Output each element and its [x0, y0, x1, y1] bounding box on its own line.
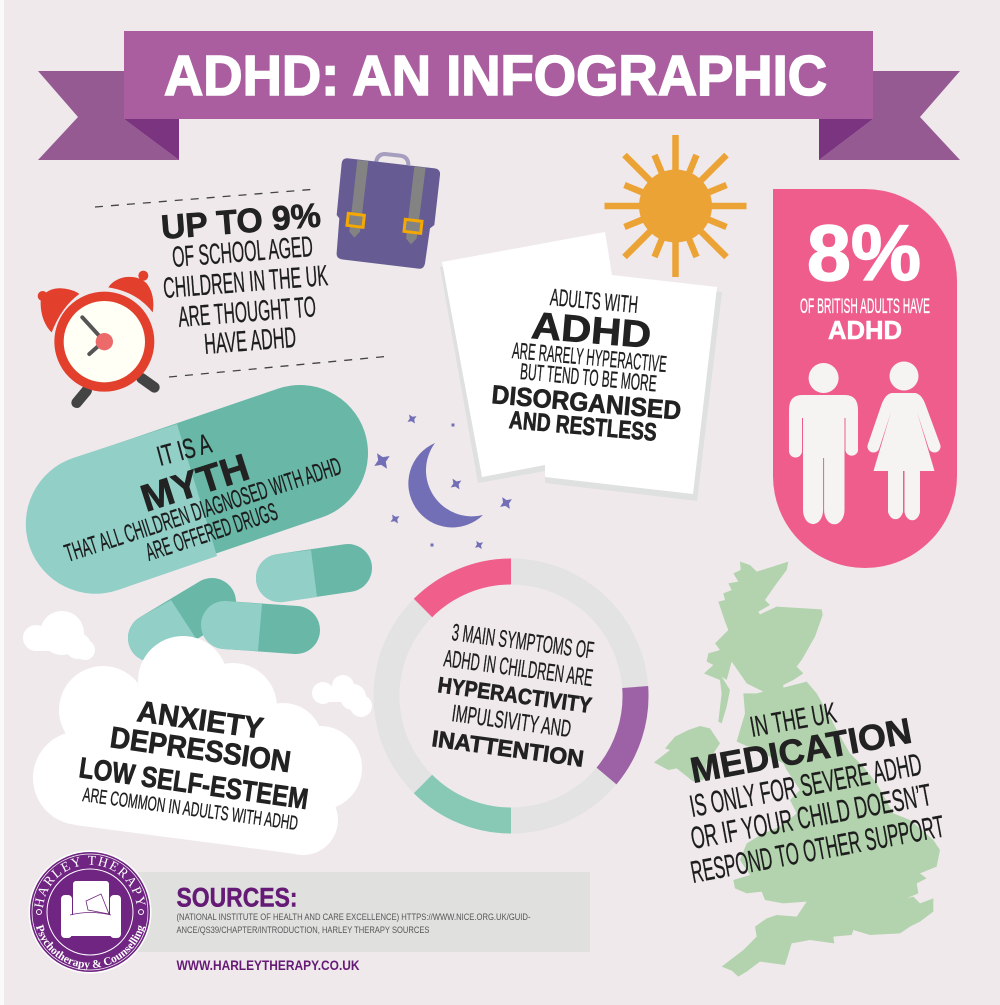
icon: armchair [61, 881, 121, 938]
block: up to 9 percent: UP TO 9% [160, 197, 322, 247]
panel: paper note: BUT TEND TO BE MORE [519, 358, 658, 396]
panel: 8 percent of British adults: 8% [807, 208, 921, 297]
icon: sun [604, 135, 746, 277]
panel: paper note: DISORGANISED [490, 379, 682, 426]
block: up to 9 percent: ARE THOUGHT TO [177, 291, 317, 334]
panel: sources: ANCE/QS39/CHAPTER/INTRODUCTION, HARLEY THERAPY SOURCES [176, 925, 430, 935]
logo: Harley Therapy: HARLEY THERAPY [34, 856, 146, 908]
chart: symptoms donut: IMPULSIVITY AND [450, 700, 573, 743]
panel: paper note: ADHD [530, 305, 653, 357]
icon: woman [867, 362, 941, 520]
panel: 8 percent of British adults [773, 189, 957, 568]
panel: 8 percent of British adults: ADHD [828, 315, 902, 345]
icon: school bag [337, 154, 440, 269]
icon: capsule back [128, 600, 212, 662]
panel: sources [130, 872, 590, 973]
panel: anxiety cloud: ARE COMMON IN ADULTS WITH ADHD [81, 784, 299, 835]
panel: anxiety cloud [33, 636, 362, 855]
panel: myth pill: IT IS A [154, 428, 215, 472]
block: up to 9 percent [95, 189, 391, 377]
panel: paper note: AND RESTLESS [508, 406, 658, 447]
panel: myth pill: ARE OFFERED DRUGS [142, 498, 281, 567]
chart: symptoms donut: ADHD IN CHILDREN ARE [442, 645, 594, 692]
logo: Harley Therapy [28, 850, 152, 974]
panel: UK map medication: MEDICATION [687, 710, 915, 791]
map: Northern Ireland [654, 726, 720, 782]
icon: capsule front [201, 601, 296, 651]
panel: anxiety cloud: ANXIETY [135, 695, 265, 746]
chart: symptoms donut: HYPERACTIVITY [436, 672, 594, 718]
panel: myth pill [26, 424, 345, 594]
panel: paper note: ARE RARELY HYPERACTIVE [511, 337, 668, 377]
block: up to 9 percent: CHILDREN IN THE UK [162, 260, 329, 305]
icon: moon and stars [374, 414, 512, 549]
panel: myth pill: MYTH [136, 447, 254, 521]
icon: man [789, 363, 858, 524]
block: up to 9 percent: OF SCHOOL AGED [171, 231, 314, 274]
panel: sources: (NATIONAL INSTITUTE OF HEALTH AND CARE EXCELLENCE) HTTPS://WWW.NICE.ORG.UK/GUID- [176, 912, 530, 922]
panel: myth pill: THAT ALL CHILDREN DIAGNOSED WITH ADHD [61, 452, 345, 568]
panel: anxiety cloud: DEPRESSION [108, 721, 293, 779]
logo: Harley Therapy: Psychotherapy & Counselling [36, 924, 146, 970]
icon: small cloud right [312, 675, 372, 717]
block: up to 9 percent: HAVE ADHD [203, 322, 297, 361]
title banner [38, 31, 960, 160]
panel: sources: SOURCES: [176, 882, 298, 912]
icon: alarm clock [38, 271, 154, 403]
panel: paper note [440, 232, 722, 501]
chart: symptoms donut [386, 572, 636, 820]
map: Great Britain [704, 562, 940, 977]
chart: symptoms donut: INATTENTION [430, 725, 585, 772]
panel: UK map medication [654, 562, 947, 977]
icon: capsule right [256, 550, 348, 602]
panel: sources: WWW.HARLEYTHERAPY.CO.UK [176, 957, 360, 973]
chart: symptoms donut: 3 MAIN SYMPTOMS OF [450, 619, 596, 665]
panel: UK map medication: IN THE UK [748, 697, 839, 744]
panel: anxiety cloud: LOW SELF-ESTEEM [77, 752, 310, 816]
ribbon tail left [38, 71, 179, 160]
ribbon tail right [819, 71, 960, 160]
panel: paper note: ADULTS WITH [549, 284, 639, 319]
title: ADHD: AN INFOGRAPHIC [164, 44, 827, 108]
icon: small cloud left [23, 611, 95, 660]
